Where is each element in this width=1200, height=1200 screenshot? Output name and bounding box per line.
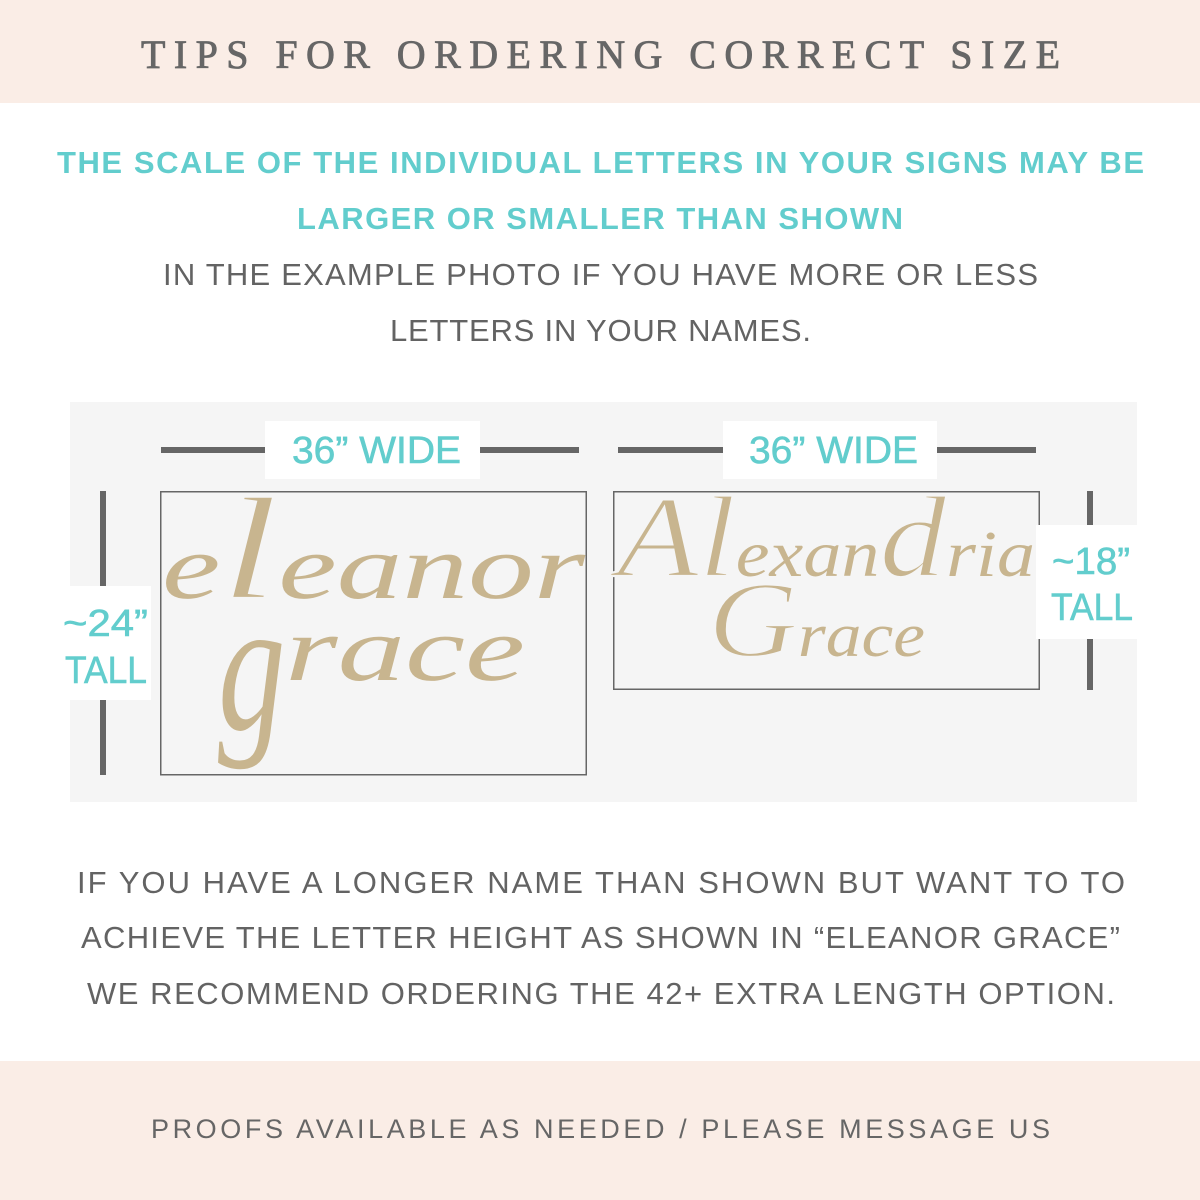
height label, left sign xyxy=(63,586,151,700)
sign lettering: Grace: Grace xyxy=(708,561,925,680)
height label, left sign: ~24” xyxy=(63,603,148,645)
width label, right sign: 36” WIDE xyxy=(749,430,918,472)
right example: Alexandria Grace sign xyxy=(609,421,1137,690)
sign lettering: grace: race xyxy=(285,598,525,700)
height dimension line, left sign xyxy=(100,491,106,775)
sign lettering: grace xyxy=(218,561,525,770)
height label, left sign: TALL xyxy=(65,650,147,692)
intro line 4: LETTERS IN YOUR NAMES. xyxy=(390,313,811,348)
highlighted intro line 1: THE SCALE OF THE INDIVIDUAL LETTERS IN YOUR SIGNS MAY BE xyxy=(57,145,1144,180)
footer band with note xyxy=(0,1061,1200,1200)
width label, right sign xyxy=(723,421,937,479)
width label, left sign xyxy=(265,421,480,479)
intro line 3: IN THE EXAMPLE PHOTO IF YOU HAVE MORE OR LESS xyxy=(163,257,1038,292)
height label, right sign: TALL xyxy=(1051,587,1133,629)
left example: eleanor grace sign xyxy=(63,421,587,775)
highlighted intro line 2: LARGER OR SMALLER THAN SHOWN xyxy=(297,201,903,236)
width label, left sign: 36” WIDE xyxy=(292,430,461,472)
height label, right sign xyxy=(1036,525,1137,639)
intro text block xyxy=(57,145,1144,348)
footer note: PROOFS AVAILABLE AS NEEDED / PLEASE MESSAGE US xyxy=(151,1114,1050,1144)
height label, right sign: ~18” xyxy=(1052,541,1130,583)
width dimension line, left sign xyxy=(161,447,579,453)
height dimension line, right sign xyxy=(1087,491,1093,690)
sign outline, left xyxy=(161,492,586,775)
sign lettering: grace: g xyxy=(218,561,285,770)
header band with title xyxy=(0,0,1200,103)
recommendation text block xyxy=(77,865,1125,1011)
sign outline, right xyxy=(614,492,1039,689)
recommendation line 1: IF YOU HAVE A LONGER NAME THAN SHOWN BUT WANT TO TO xyxy=(77,865,1125,900)
width dimension line, right sign xyxy=(618,447,1036,453)
panel: size comparison xyxy=(63,402,1137,802)
recommendation line 2: ACHIEVE THE LETTER HEIGHT AS SHOWN IN “ELEANOR GRACE” xyxy=(81,920,1120,955)
title: TIPS FOR ORDERING CORRECT SIZE xyxy=(141,32,1060,77)
recommendation line 3: WE RECOMMEND ORDERING THE 42+ EXTRA LENGTH OPTION. xyxy=(87,976,1115,1011)
sign lettering: Alexandria: Alexandria xyxy=(609,474,1035,602)
sign lettering: eleanor: eleanor xyxy=(162,468,587,630)
